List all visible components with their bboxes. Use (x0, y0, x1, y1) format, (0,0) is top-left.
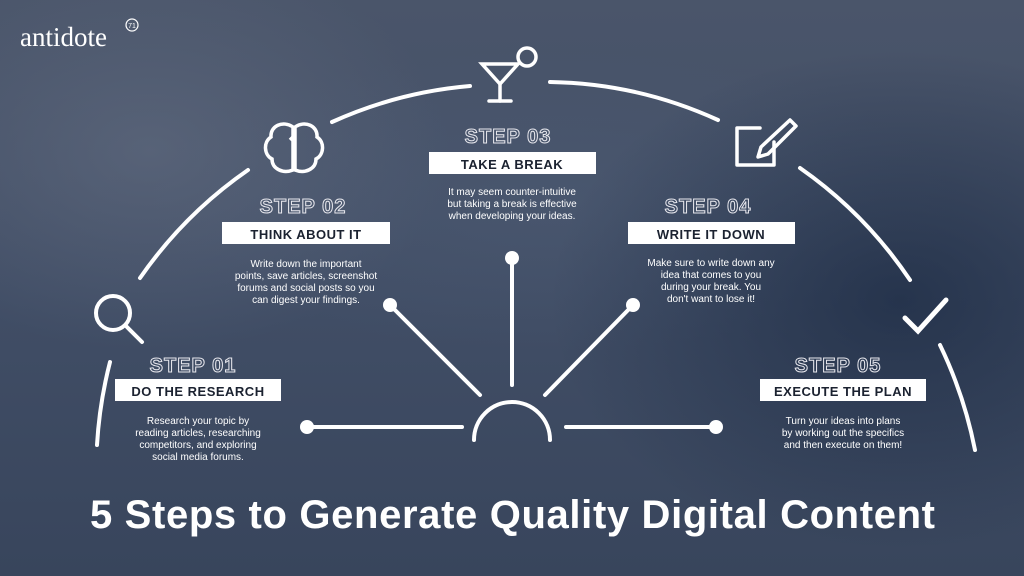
step 01: DO THE RESEARCH (131, 384, 265, 399)
step 03: when developing your ideas. (448, 211, 575, 222)
step 02: STEP 02 (260, 196, 346, 218)
icon: cocktail glass (482, 48, 536, 101)
logo: antidote (20, 22, 107, 52)
step 05 (760, 355, 926, 451)
step 01: competitors, and exploring (139, 440, 257, 451)
step 05: by working out the specifics (782, 428, 904, 439)
step 02: THINK ABOUT IT (250, 227, 362, 242)
step 01 (115, 355, 281, 463)
main arc (97, 82, 975, 450)
step 05: EXECUTE THE PLAN (774, 384, 912, 399)
step 04: Make sure to write down any (647, 258, 775, 269)
icon: brain (265, 124, 323, 171)
icon: edit (737, 120, 796, 165)
step 02: Write down the important (251, 259, 362, 270)
step 04 (628, 196, 795, 305)
step 05: Turn your ideas into plans (786, 416, 900, 427)
step 03: It may seem counter-intuitive (448, 187, 576, 198)
step 05: and then execute on them! (784, 440, 902, 451)
step 02 (222, 196, 390, 306)
step 04: during your break. You (661, 282, 761, 293)
step 03: but taking a break is effective (447, 199, 577, 210)
step 02: points, save articles, screenshot (235, 271, 377, 282)
step 04: STEP 04 (665, 196, 751, 218)
icon: magnifier (96, 296, 142, 342)
hub with spokes (300, 251, 723, 440)
step 01: social media forums. (152, 452, 244, 463)
step 04: WRITE IT DOWN (657, 227, 765, 242)
step 03: STEP 03 (465, 126, 551, 148)
step 05: STEP 05 (795, 355, 881, 377)
step 04: don't want to lose it! (667, 294, 755, 305)
icon: checkmark (905, 300, 946, 331)
step 03 (429, 126, 596, 222)
title: 5 Steps to Generate Quality Digital Content (90, 493, 935, 537)
step 02: forums and social posts so you (237, 283, 375, 294)
step 01: STEP 01 (150, 355, 236, 377)
logo: 71 (128, 23, 136, 30)
logo (20, 19, 138, 52)
step 04: idea that comes to you (661, 270, 761, 281)
step 03: TAKE A BREAK (461, 157, 563, 172)
step 02: can digest your findings. (252, 295, 360, 306)
step 01: reading articles, researching (135, 428, 261, 439)
step 01: Research your topic by (147, 416, 249, 427)
